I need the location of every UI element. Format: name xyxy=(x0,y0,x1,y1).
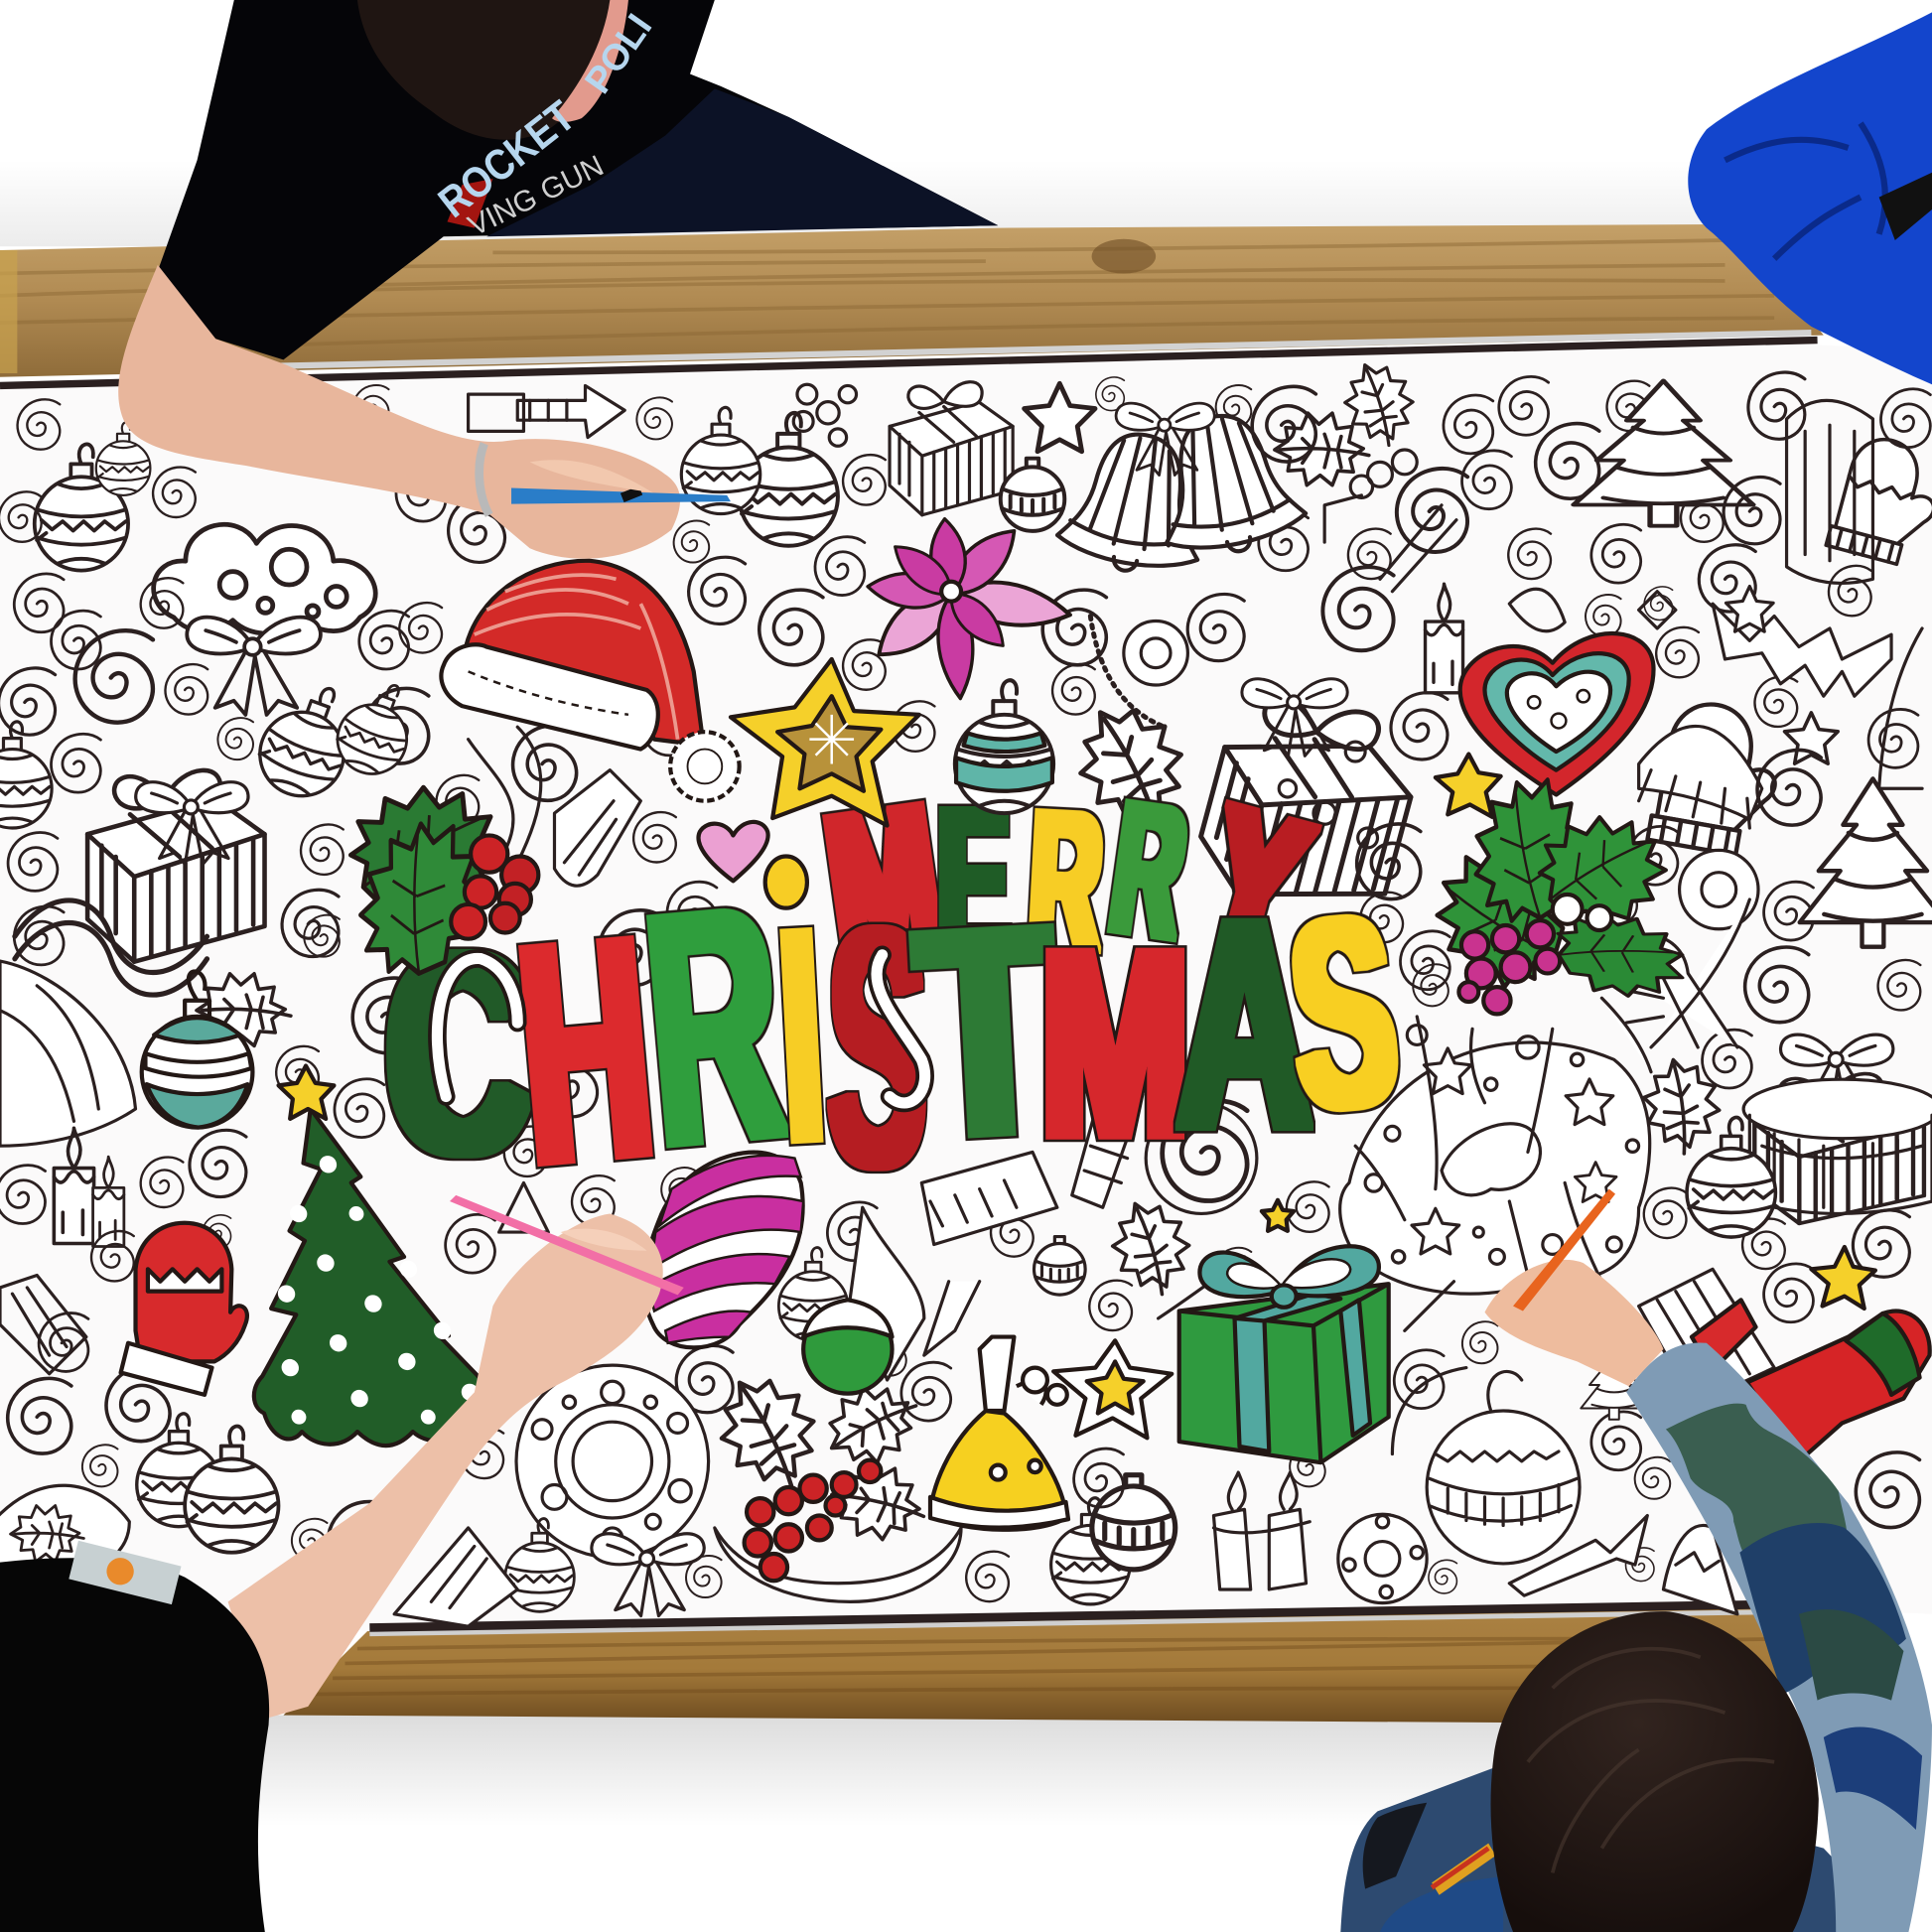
right holly with magenta berries xyxy=(1411,774,1693,1014)
magenta striped ornament xyxy=(643,1153,803,1347)
ribbon through letter S xyxy=(877,955,925,1103)
red stocking xyxy=(1692,1300,1930,1461)
title word: merry: R xyxy=(1101,761,1196,979)
green gift with teal ribbon xyxy=(1179,1246,1389,1462)
title word: christmas: R xyxy=(634,836,795,1215)
doodles: lower middle xyxy=(203,1050,1453,1380)
teal ornament xyxy=(955,680,1053,813)
red berries xyxy=(745,1460,881,1581)
person top: black shirt and hair xyxy=(158,0,998,359)
doodles: right side xyxy=(1601,587,1932,1614)
poinsettia xyxy=(866,517,1073,700)
title word: merry xyxy=(815,759,1327,1003)
doodles: bottom row xyxy=(292,1343,1647,1626)
yellow dot xyxy=(765,857,807,908)
wooden table top edge xyxy=(0,224,1824,377)
title word: merry: M xyxy=(815,759,952,1003)
poster top border xyxy=(0,341,1818,385)
person top: black shirt and hair: VING GUN xyxy=(463,149,609,243)
person top: arm, hand and blue marker xyxy=(118,265,731,559)
title word: christmas: T xyxy=(911,863,1062,1200)
ribbon through letter C xyxy=(437,958,517,1097)
holly leaves with red berries xyxy=(341,774,538,989)
title word: christmas: C xyxy=(386,894,530,1213)
green ornament xyxy=(803,1300,893,1394)
doodles: upper middle xyxy=(689,495,1676,942)
title word: merry: R xyxy=(1025,770,1107,993)
small pink heart xyxy=(699,822,768,881)
red mitten xyxy=(121,1223,247,1395)
title word: christmas: S xyxy=(1281,861,1407,1167)
teal ornament left xyxy=(142,971,252,1128)
person top: black shirt and hair: POLI xyxy=(576,6,659,100)
person bottom right: head of dark hair xyxy=(1491,1611,1819,1932)
yellow bag xyxy=(930,1337,1068,1530)
doodles: top row xyxy=(0,353,1932,633)
inner yellow of gold star xyxy=(1087,1361,1144,1414)
black and white doodle illustrations xyxy=(0,353,1932,1626)
person bottom right: hand and orange marker xyxy=(1484,1189,1663,1386)
title word: merry: E xyxy=(938,765,1009,996)
yellow star right of title xyxy=(1436,755,1501,817)
merry christmas title xyxy=(386,759,1407,1236)
shirt label xyxy=(69,1541,181,1604)
table shadow bottom xyxy=(246,1716,1601,1826)
gold star cookie xyxy=(731,659,919,826)
wooden table bottom edge xyxy=(283,1601,1793,1723)
yellow star right xyxy=(1811,1247,1875,1309)
red and teal heart xyxy=(1460,633,1654,794)
title word: christmas: I xyxy=(771,867,832,1206)
shirt print text: ROCKET xyxy=(429,91,584,227)
person bottom right: jacket xyxy=(1340,1762,1903,1932)
title word: christmas: A xyxy=(1177,858,1311,1191)
gold outline star xyxy=(1053,1340,1172,1438)
title word: christmas: M xyxy=(1041,893,1189,1193)
title word: christmas: S xyxy=(828,857,927,1236)
christmas tree xyxy=(237,1066,512,1446)
doodles: filler swirls xyxy=(14,377,1920,1601)
small yellow star centre xyxy=(1262,1200,1294,1231)
title word: merry: Y xyxy=(1184,762,1327,998)
title word: christmas xyxy=(386,836,1407,1236)
doodles: wreath xyxy=(1340,1017,1650,1294)
doodles: left side xyxy=(0,578,676,1584)
title word: christmas: H xyxy=(507,872,664,1231)
coloring poster paper xyxy=(0,345,1932,1631)
person bottom left: black shirt xyxy=(0,1541,269,1932)
person bottom left: arm, hand and pink marker xyxy=(228,1195,684,1719)
table shadow top xyxy=(0,160,1932,246)
poster bottom border xyxy=(369,1604,1780,1627)
person bottom right: camo sleeve xyxy=(1626,1343,1932,1932)
person top right: blue sleeve xyxy=(1688,12,1932,384)
santa hat xyxy=(441,561,740,801)
